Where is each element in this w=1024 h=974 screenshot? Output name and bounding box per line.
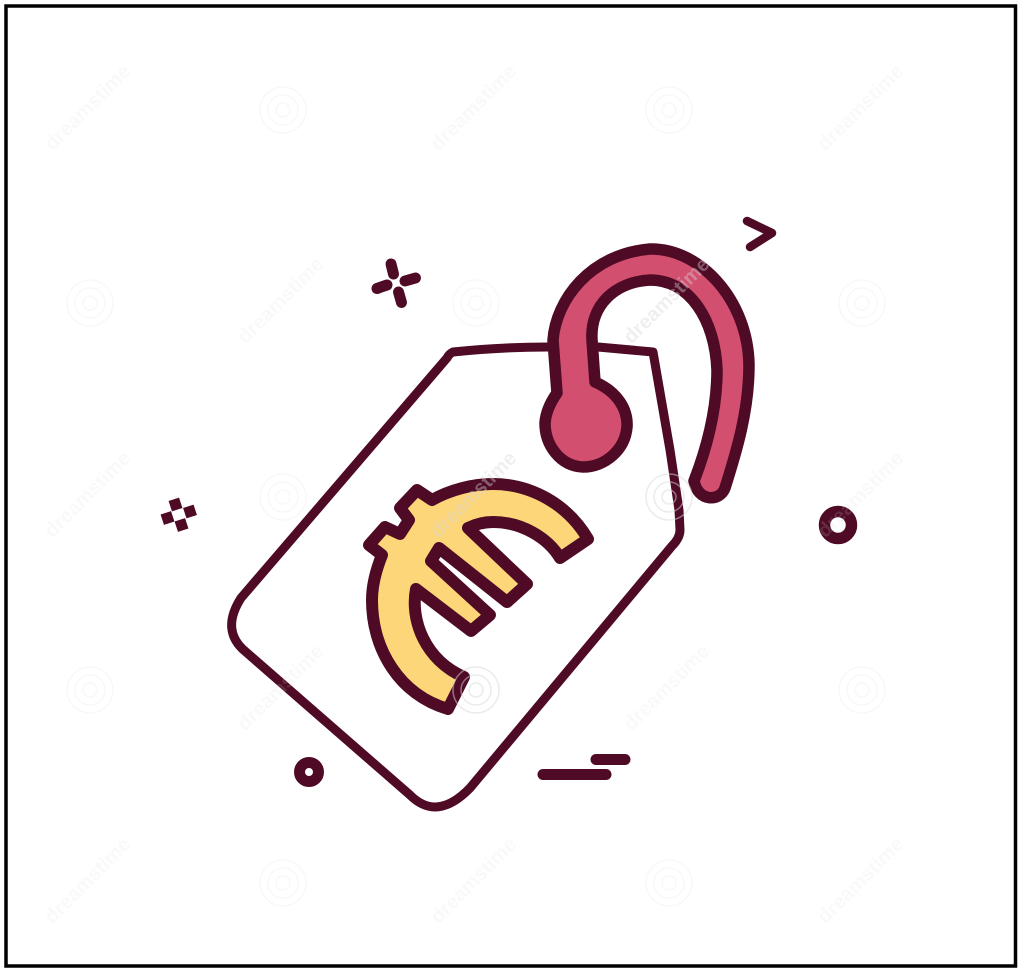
watermark text <box>40 60 908 928</box>
price tag outline <box>232 347 680 807</box>
watermark text: dreamstime <box>233 253 328 348</box>
watermark text: dreamstime <box>40 60 135 155</box>
tag string loop <box>545 249 749 498</box>
watermark text: dreamstime <box>233 640 328 735</box>
icon: speed lines <box>543 760 625 774</box>
watermark text: dreamstime <box>813 833 908 928</box>
icon: checker diamond <box>161 498 197 532</box>
watermark text: dreamstime <box>426 833 521 928</box>
watermark spirals <box>67 87 885 906</box>
watermark text: dreamstime <box>813 447 908 542</box>
watermark text: dreamstime <box>40 833 135 928</box>
watermark text: dreamstime <box>813 60 908 155</box>
watermark text: dreamstime <box>619 253 714 348</box>
euro symbol <box>369 484 588 709</box>
watermark text: dreamstime <box>40 447 135 542</box>
watermark text: dreamstime <box>426 60 521 155</box>
icon: chevron <box>747 221 772 247</box>
icon: ring lower left <box>300 762 318 782</box>
icon: ring right <box>824 512 852 538</box>
icon: four-petal sparkle <box>377 264 416 302</box>
watermark text: dreamstime <box>426 447 521 542</box>
watermark text: dreamstime <box>619 640 714 735</box>
